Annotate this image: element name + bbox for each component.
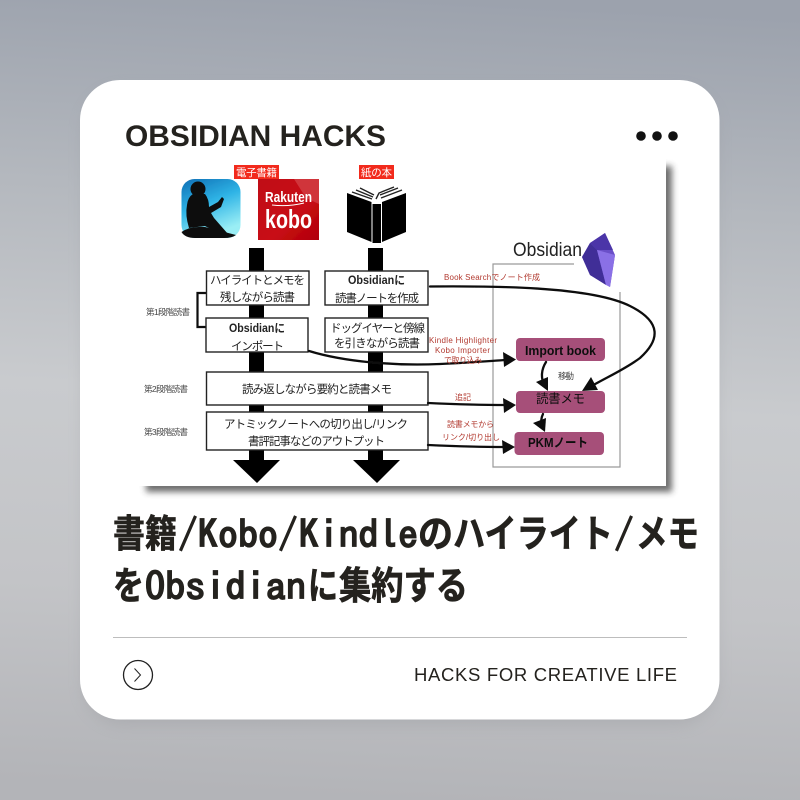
label: Kindle and Kobo import: で取り込み bbox=[444, 356, 482, 365]
main title: ハイライト bbox=[453, 503, 613, 558]
bracket: stage 1 bbox=[198, 293, 206, 327]
box: dog-ear and underline: ドッグイヤーと傍線 bbox=[330, 321, 426, 335]
arrowhead: right bbox=[353, 460, 400, 483]
box: import to Obsidian: Obsidianに bbox=[229, 322, 285, 335]
Obsidian frame bbox=[493, 264, 620, 467]
heading: Obsidian: Obsidian bbox=[513, 239, 582, 261]
label: from reading memo: リンク/切り出し bbox=[442, 432, 500, 442]
label: Kindle and Kobo import: Kobo Importer bbox=[435, 346, 490, 355]
box: import to Obsidian bbox=[206, 318, 308, 353]
icon: Kindle app bbox=[182, 179, 240, 238]
card bbox=[80, 80, 720, 724]
label: append: 追記 bbox=[455, 392, 471, 402]
label: Kindle and Kobo import bbox=[429, 336, 497, 365]
diagram image panel bbox=[136, 156, 672, 492]
node: PKM note bbox=[514, 432, 604, 455]
arrow: link and extract bbox=[428, 440, 515, 454]
box: atomic notes and output: アトミックノートへの切り出し/リンク bbox=[224, 418, 408, 431]
arrowhead: left bbox=[233, 460, 280, 483]
box: summary and reading memo bbox=[206, 372, 428, 405]
divider bbox=[113, 637, 687, 638]
box: highlight and memo: 残しながら読書 bbox=[220, 290, 295, 304]
icon: Rakuten Kobo: kobo bbox=[265, 204, 312, 234]
main title: 集約する bbox=[339, 555, 468, 610]
main title: / bbox=[179, 515, 197, 553]
box: summary and reading memo: 読み返しながら要約と読書メモ bbox=[242, 382, 392, 396]
tagline: HACKS FOR CREATIVE LIFE bbox=[414, 664, 677, 685]
label: stage 1 reading: 第1段階読書 bbox=[146, 307, 190, 317]
label: stage 2 reading: 第2段階読書 bbox=[144, 384, 188, 394]
box: dog-ear and underline: を引きながら読書 bbox=[334, 336, 420, 350]
label: electronic books: 電子書籍 bbox=[236, 166, 277, 179]
label: move: 移動 bbox=[558, 371, 574, 381]
icon: open book bbox=[347, 187, 406, 243]
main title: Obsidian bbox=[145, 567, 306, 605]
box: import to Obsidian: インポート bbox=[231, 340, 284, 353]
label: Book Search: Book Searchでノート作成 bbox=[444, 272, 540, 282]
left flow bar bbox=[249, 248, 264, 460]
node: reading memo: 読書メモ bbox=[536, 392, 585, 406]
node: Import book: Import book bbox=[525, 344, 596, 358]
box: highlight and memo: ハイライトとメモを bbox=[210, 274, 305, 287]
node: reading memo bbox=[516, 391, 605, 413]
icon: circled chevron bbox=[124, 660, 152, 690]
main title: Kobo bbox=[198, 515, 278, 553]
main title: / bbox=[615, 515, 633, 553]
box: create reading note: Obsidianに bbox=[348, 274, 405, 287]
main title: に bbox=[308, 555, 338, 610]
main title: 書籍 bbox=[113, 503, 177, 558]
node: Import book bbox=[516, 338, 605, 361]
label: from reading memo: 読書メモから bbox=[447, 419, 494, 429]
arrow: highlighter import bbox=[309, 351, 516, 367]
label: from reading memo bbox=[442, 419, 500, 442]
main title: メモ bbox=[636, 503, 699, 558]
box: highlight and memo bbox=[206, 271, 309, 305]
box: atomic notes and output bbox=[206, 412, 428, 450]
arrow: reading memo to PKM note bbox=[533, 414, 546, 432]
right flow bar bbox=[368, 248, 383, 460]
main title: を bbox=[113, 555, 144, 610]
arrow: import book to reading memo bbox=[536, 362, 548, 391]
icon: Obsidian gem bbox=[582, 233, 615, 287]
icon: Rakuten Kobo bbox=[258, 179, 319, 240]
label: Kindle and Kobo import: Kindle Highlighter bbox=[429, 336, 497, 345]
box: atomic notes and output: 書評記事などのアウトプット bbox=[248, 434, 385, 448]
box: dog-ear and underline bbox=[325, 318, 428, 352]
box: create reading note bbox=[325, 271, 428, 305]
label: paper books: 紙の本 bbox=[361, 166, 392, 179]
main title: Kindle bbox=[299, 515, 418, 553]
icon: three dots menu bbox=[636, 131, 678, 141]
label: stage 3 reading: 第3段階読書 bbox=[144, 427, 188, 437]
node: PKM note: PKMノート bbox=[528, 436, 588, 450]
arrow: add to reading memo bbox=[428, 398, 516, 413]
main title: の bbox=[418, 503, 453, 558]
box: create reading note: 読書ノートを作成 bbox=[335, 291, 420, 305]
icon: Rakuten Kobo: Rakuten bbox=[265, 189, 312, 206]
main title: / bbox=[279, 515, 297, 553]
heading: Obsidian Hacks: OBSIDIAN HACKS bbox=[125, 120, 386, 153]
arrow: book search to reading memo bbox=[430, 286, 655, 391]
